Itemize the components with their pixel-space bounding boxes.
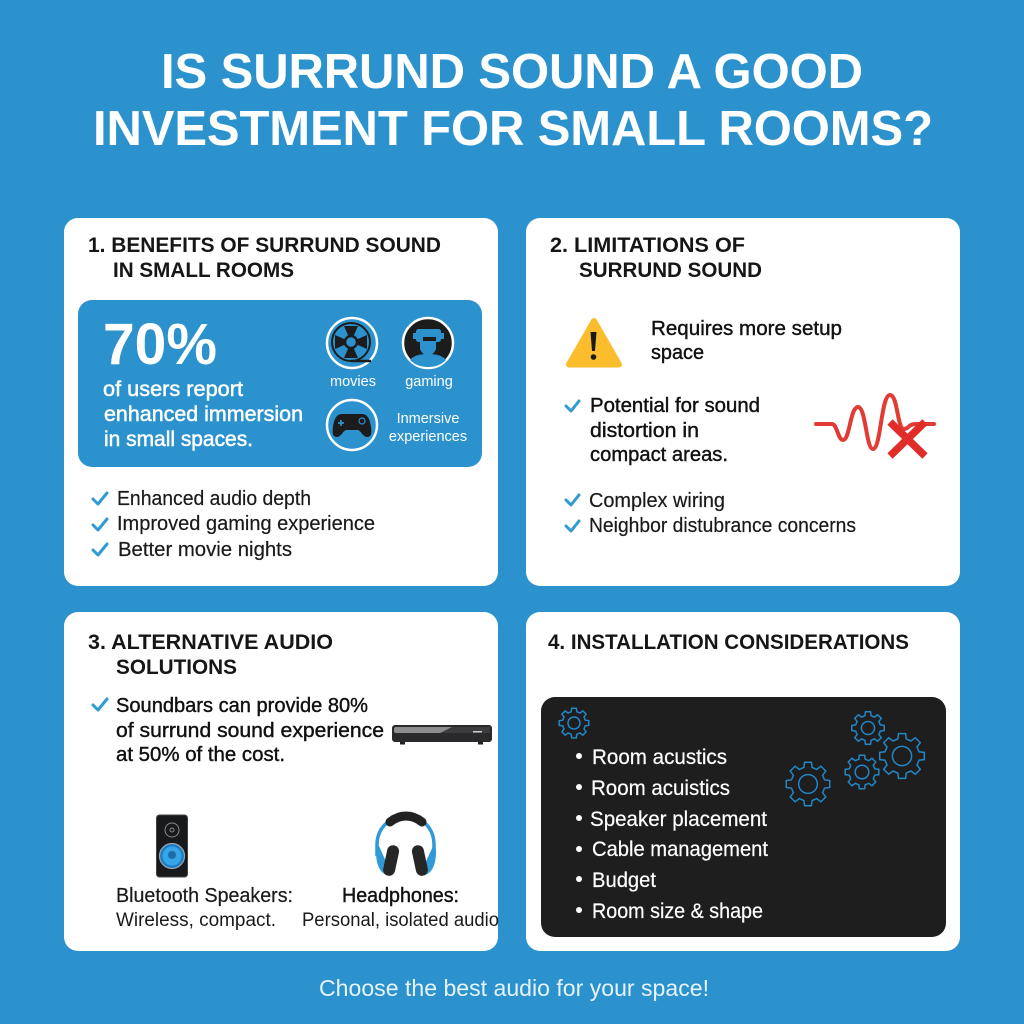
panel: alternatives bbox=[64, 612, 499, 951]
icon: VR gaming bbox=[403, 318, 453, 368]
heading: limitations: 2. LIMITATIONS OF bbox=[550, 234, 745, 257]
panel: limitations bbox=[526, 218, 960, 586]
text: sound distortion: compact areas. bbox=[590, 444, 728, 466]
benefits checklist bbox=[93, 488, 375, 561]
label: immersive experiences bbox=[389, 411, 467, 445]
footer tagline: Choose the best audio for your space! bbox=[319, 975, 709, 1001]
text: soundbars bbox=[93, 695, 384, 766]
text: sound distortion bbox=[566, 395, 760, 466]
stat description: enhanced immersion bbox=[104, 403, 303, 426]
text: sound distortion: distortion in bbox=[590, 420, 699, 442]
stat description bbox=[103, 378, 303, 451]
label: bluetooth speakers: Bluetooth Speakers: bbox=[116, 885, 293, 907]
benefits checklist: Improved gaming experience bbox=[117, 513, 375, 535]
benefits checklist: Better movie nights bbox=[118, 539, 292, 561]
limitations checklist bbox=[566, 490, 856, 537]
text: setup space: Requires more setup bbox=[651, 318, 842, 340]
considerations list bbox=[576, 746, 768, 923]
stat description: of users report bbox=[103, 378, 243, 401]
icon: warning triangle bbox=[569, 321, 619, 364]
heading: benefits: 1. BENEFITS OF SURRUND SOUND bbox=[88, 234, 441, 257]
considerations list: Budget bbox=[592, 869, 656, 892]
panel: benefits bbox=[64, 218, 498, 586]
label: immersive experiences: Inmersive bbox=[397, 411, 459, 427]
limitations checklist: Neighbor distubrance concerns bbox=[589, 515, 856, 537]
label: headphones: Headphones: bbox=[342, 885, 459, 907]
heading: benefits: IN SMALL ROOMS bbox=[113, 259, 294, 282]
label: headphones: Personal, isolated audio bbox=[302, 910, 499, 931]
considerations list: Room acustics bbox=[592, 746, 727, 769]
label: gaming: gaming bbox=[405, 374, 453, 390]
heading: installation: 4. INSTALLATION CONSIDERATIONS bbox=[548, 631, 909, 654]
considerations list: Room size & shape bbox=[592, 900, 763, 923]
heading: alternatives: SOLUTIONS bbox=[116, 656, 237, 679]
icon: soundbar bbox=[392, 725, 492, 744]
label: bluetooth speakers bbox=[116, 885, 293, 931]
considerations list: Cable management bbox=[592, 838, 768, 861]
title: INVESTMENT FOR SMALL ROOMS? bbox=[93, 102, 933, 156]
text: soundbars: Soundbars can provide 80% bbox=[116, 695, 368, 717]
label: immersive experiences: experiences bbox=[389, 429, 467, 445]
heading: alternatives bbox=[88, 631, 333, 679]
limitations checklist: Complex wiring bbox=[589, 490, 725, 512]
title bbox=[93, 45, 933, 156]
icon: distorted wave with cross bbox=[816, 395, 934, 456]
title: IS SURRUND SOUND A GOOD bbox=[161, 45, 863, 99]
icon: headphones bbox=[376, 816, 436, 877]
heading: limitations: SURRUND SOUND bbox=[579, 259, 762, 282]
dark considerations box bbox=[541, 697, 946, 937]
label: headphones bbox=[302, 885, 499, 931]
label: bluetooth speakers: Wireless, compact. bbox=[116, 910, 276, 931]
icon: film reel bbox=[327, 318, 377, 368]
considerations list: Room acuistics bbox=[591, 777, 730, 800]
heading: benefits bbox=[88, 234, 441, 282]
icon: gears bbox=[559, 708, 924, 806]
text: soundbars: at 50% of the cost. bbox=[116, 744, 285, 766]
heading: alternatives: 3. ALTERNATIVE AUDIO bbox=[88, 631, 333, 654]
heading: limitations bbox=[550, 234, 762, 282]
stat number: 70% bbox=[103, 312, 217, 377]
label: movies: movies bbox=[330, 374, 376, 390]
callout: 70 percent statistic bbox=[78, 300, 482, 467]
stat description: in small spaces. bbox=[104, 428, 253, 451]
text: setup space bbox=[651, 318, 842, 364]
considerations list: Speaker placement bbox=[590, 808, 767, 831]
panel: installation bbox=[526, 612, 960, 951]
icon: bluetooth speaker bbox=[156, 815, 188, 877]
text: setup space: space bbox=[651, 342, 704, 364]
icon: gamepad bbox=[327, 400, 377, 450]
text: soundbars: of surrund sound experience bbox=[116, 720, 384, 742]
benefits checklist: Enhanced audio depth bbox=[117, 488, 311, 510]
text: sound distortion: Potential for sound bbox=[590, 395, 760, 417]
